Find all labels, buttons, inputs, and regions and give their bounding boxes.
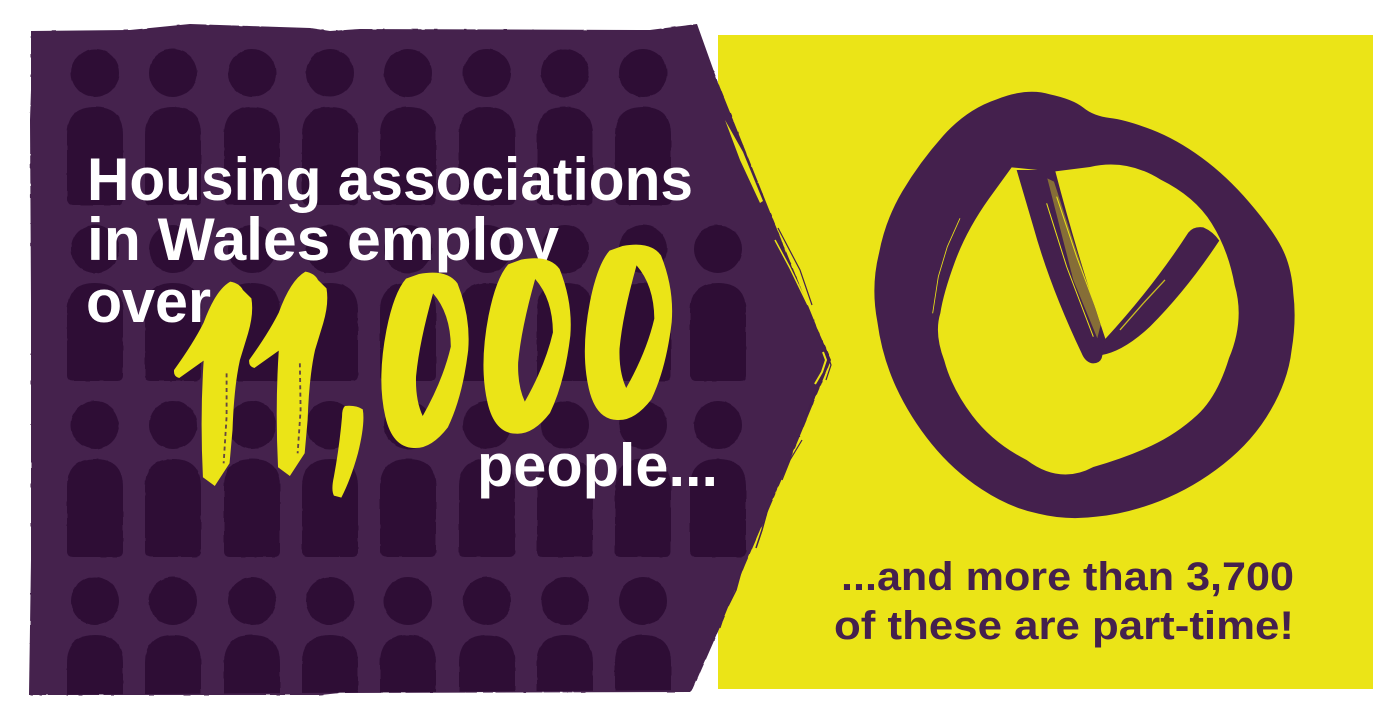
text: part-time statement: of these are part-time!: [834, 604, 1294, 648]
big number: 11,000 brush lettering: [174, 245, 672, 498]
clock short hand: [1101, 227, 1219, 355]
icon: rows of people pattern: [67, 49, 746, 720]
panel: purple arrow: [29, 24, 831, 695]
heading: housing associations text: in Wales employ: [87, 206, 560, 273]
heading: housing associations text: over: [86, 268, 211, 335]
heading: housing associations text: Housing associations: [87, 146, 693, 213]
11,000 brush texture marks: [224, 363, 301, 463]
text: people: people...: [477, 432, 718, 499]
panel: yellow part-time panel: [718, 35, 1373, 689]
clock brush streaks: [933, 178, 1165, 338]
text: part-time statement: [834, 555, 1294, 648]
heading: housing associations text: [86, 146, 693, 335]
text: part-time statement: ...and more than 3,700: [841, 555, 1294, 599]
arrow edge brush streaks: [720, 120, 831, 628]
icon: part-time clock: [874, 92, 1295, 518]
clock long hand: [1017, 170, 1106, 363]
